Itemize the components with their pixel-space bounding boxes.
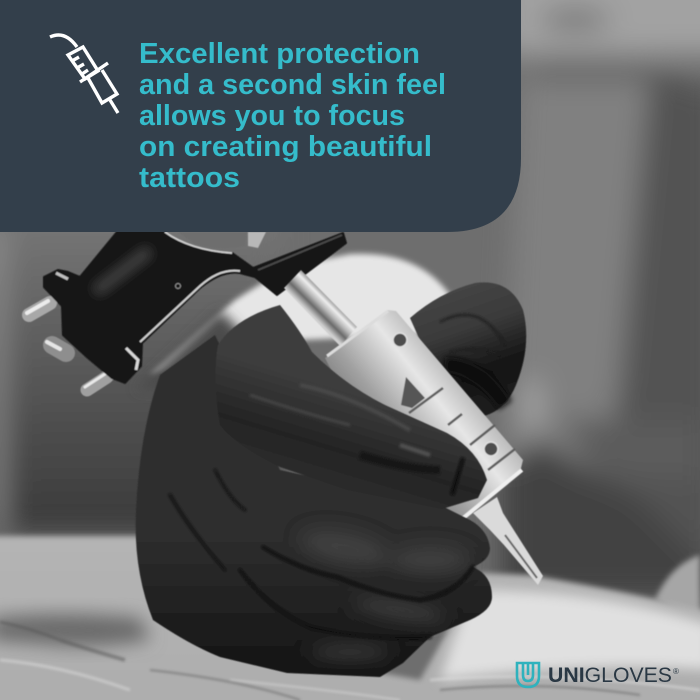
tabletop bright band — [440, 590, 700, 680]
machine top opening — [178, 232, 247, 249]
index finger texture — [250, 385, 463, 495]
photo: light wrist behind the hand — [135, 254, 452, 390]
tabletop grain dark — [0, 622, 640, 700]
photo: tattoo machine frame — [27, 232, 346, 390]
icon: syringe — [50, 35, 118, 113]
header panel — [0, 0, 521, 232]
heading text: and a second skin feel — [139, 69, 446, 101]
photo: silver tube — [284, 270, 357, 346]
soft hand highlights — [298, 523, 470, 660]
registered mark: ® — [673, 667, 679, 676]
logo: Unigloves — [517, 663, 679, 687]
wordmark: UNIGLOVES — [548, 663, 672, 687]
heading text — [139, 38, 446, 194]
finger creases — [170, 470, 473, 638]
heading text: on creating beautiful — [139, 131, 432, 163]
heading text: tattoos — [139, 162, 240, 194]
icon: U glove mark — [517, 663, 539, 687]
heading text: allows you to focus — [139, 100, 405, 132]
photo: metal grip — [325, 310, 523, 533]
index finger — [215, 305, 487, 509]
tabletop dark mottling — [0, 614, 150, 647]
photo: thumb — [410, 282, 526, 417]
machine frame pins — [27, 301, 107, 390]
photo: tabletop — [0, 536, 700, 700]
photo: gloved hand — [136, 305, 492, 677]
lower fingers and palm — [136, 335, 492, 677]
photo: needle tip — [473, 497, 543, 585]
machine body — [44, 232, 346, 383]
machine highlights — [56, 232, 342, 370]
tabletop grain light — [0, 660, 700, 700]
heading text: Excellent protection — [139, 38, 420, 70]
